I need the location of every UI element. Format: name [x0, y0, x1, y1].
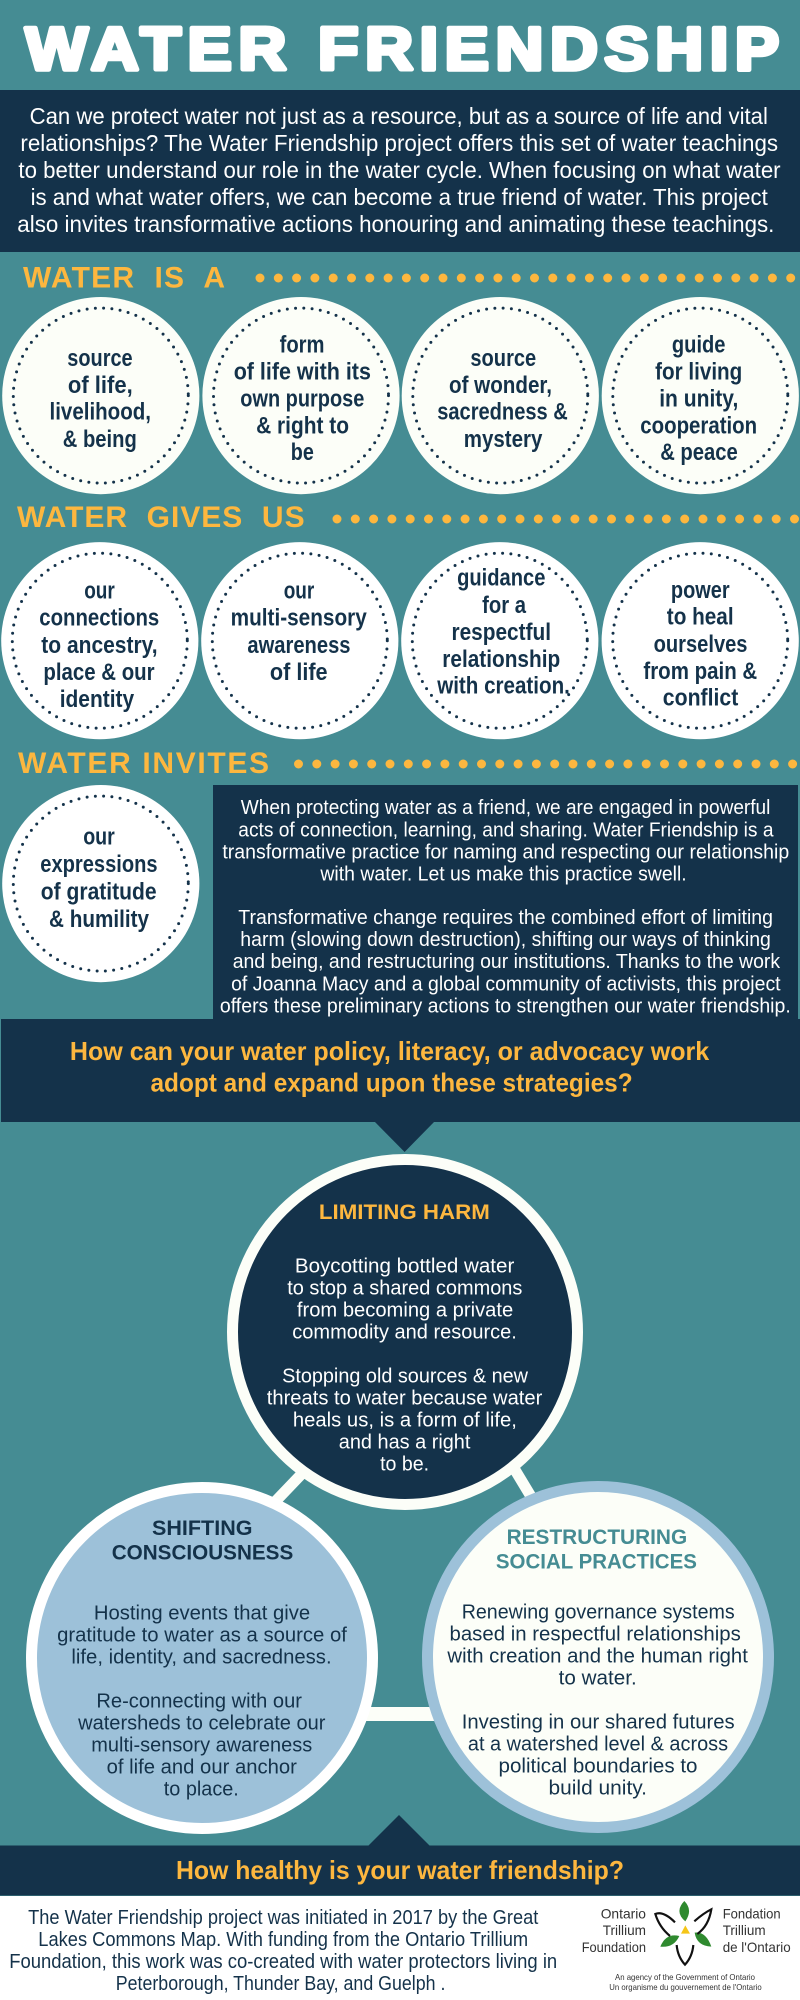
circle: expressions of gratitude: of gratitude [41, 879, 157, 906]
footer credit text [9, 1906, 557, 1995]
circle: expressions of gratitude [2, 785, 199, 982]
circle: source of life: of life, [68, 372, 133, 399]
footer credit text: Foundation, this work was co-created with water protectors living in [9, 1950, 557, 1973]
circle: connections: place & our [43, 659, 155, 686]
banner: strategies question: adopt and expand upon these strategies? [150, 1068, 633, 1098]
circle: limiting harm: to be. [380, 1453, 429, 1476]
logo: Ontario Trillium Foundation: An agency of the Government of Ontario [615, 1972, 755, 1982]
circle: guidance [401, 542, 598, 739]
circle: source of wonder: of wonder, [449, 372, 552, 399]
logo: Ontario Trillium Foundation: Fondation [723, 1905, 781, 1921]
circle: shifting consciousness [32, 1488, 372, 1828]
circle: multi-sensory awareness [201, 542, 398, 739]
circle: power to heal: to heal [667, 604, 734, 631]
circle: form of life: form [280, 331, 324, 358]
circle: connections: identity [60, 686, 135, 713]
logo: Ontario Trillium Foundation: de l'Ontario [723, 1939, 791, 1955]
circle: restructuring social practices: to water. [559, 1666, 637, 1689]
circle: shifting consciousness: watersheds to celebrate our [77, 1711, 326, 1734]
panel: transformative practice text: When protecting water as a friend, we are engaged in powerful [241, 796, 770, 819]
panel: transformative practice text [213, 785, 798, 1020]
circle: restructuring social practices: at a watershed level & across [468, 1732, 728, 1755]
circle: form of life: & right to [256, 412, 349, 439]
circle: limiting harm: commodity and resource. [292, 1321, 517, 1344]
circle: limiting harm [232, 1160, 578, 1504]
circle: guidance: guidance [457, 565, 545, 592]
banner: strategies question [1, 1019, 800, 1152]
circle: limiting harm: LIMITING HARM [319, 1201, 490, 1224]
circle: source of wonder: source [470, 345, 536, 372]
circle: guidance: respectful [452, 619, 551, 646]
circle: connections: to ancestry, [41, 632, 158, 659]
circle: form of life [202, 297, 400, 494]
circle: guide for living [602, 297, 799, 494]
circle: source of life: & being [63, 426, 137, 453]
panel: introduction [0, 90, 800, 252]
circle: limiting harm: Boycotting bottled water [295, 1255, 514, 1278]
intro text: also invites transformative actions honouring and animating these teachings. [17, 211, 774, 237]
panel: water is a circles [2, 297, 799, 494]
circle: multi-sensory awareness: multi-sensory [231, 605, 367, 632]
intro text: Can we protect water not just as a resource, but as a source of life and vital [30, 103, 768, 129]
banner: water friendship health question: How healthy is your water friendship? [176, 1855, 624, 1885]
logo: Ontario Trillium Foundation: Foundation [582, 1939, 646, 1955]
circle: shifting consciousness: Hosting events that give [94, 1601, 310, 1624]
circle: expressions of gratitude: & humility [49, 906, 149, 933]
circle: power to heal: conflict [663, 685, 738, 712]
circle: guidance: for a [482, 592, 526, 619]
banner: strategies question: How can your water policy, literacy, or advocacy work [70, 1036, 710, 1066]
footer credit text: Peterborough, Thunder Bay, and Guelph . [116, 1972, 445, 1995]
circle: source of wonder: mystery [464, 426, 543, 453]
circle: restructuring social practices: SOCIAL PRACTICES [496, 1550, 697, 1573]
circle: restructuring social practices: Investing in our shared futures [462, 1710, 735, 1733]
circle: guide for living: & peace [660, 439, 738, 466]
circle: restructuring social practices: political boundaries to [498, 1754, 698, 1777]
panel: transformative practice text: with water. Let us make this practice swell. [319, 863, 687, 886]
circle: guidance: relationship [442, 646, 560, 673]
panel: transformative practice text: Transformative change requires the combined effort of limiting [238, 906, 773, 929]
circle: source of life: livelihood, [50, 398, 151, 426]
logo: Ontario Trillium Foundation [582, 1901, 791, 1992]
circle: form of life: be [291, 439, 314, 466]
intro text: is and what water offers, we can become a true friend of water. This project [31, 184, 768, 210]
circle: restructuring social practices: RESTRUCTURING [507, 1526, 687, 1549]
panel: transformative practice text: of Joanna Macy and a global community of activists, this project [231, 972, 781, 995]
circle: multi-sensory awareness: of life [270, 659, 328, 686]
panel: transformative practice text: acts of connection, learning, and sharing. Water Friendship is a [238, 818, 774, 841]
circle: multi-sensory awareness: awareness [247, 632, 350, 659]
logo: Ontario Trillium Foundation: Trillium [603, 1922, 646, 1938]
heading: water gives us: WATER GIVES US [17, 501, 305, 534]
circle: expressions of gratitude: our [83, 823, 115, 850]
heading: water invites: WATER INVITES [18, 747, 269, 780]
circle: shifting consciousness: multi-sensory awareness [91, 1733, 312, 1756]
logo: Ontario Trillium Foundation: Trillium [723, 1922, 766, 1938]
circle: source of wonder [402, 297, 599, 494]
circle: shifting consciousness: CONSCIOUSNESS [112, 1541, 293, 1564]
circle: shifting consciousness: of life and our anchor [107, 1755, 297, 1778]
circle: power to heal [602, 542, 799, 739]
icon: trillium flower [655, 1901, 711, 1965]
circle: connections: our [84, 578, 115, 605]
circle: guide for living: guide [672, 331, 726, 358]
circle: limiting harm: to stop a shared commons [287, 1277, 522, 1300]
circle: power to heal: from pain & [643, 658, 757, 685]
circle: limiting harm: heals us, is a form of life, [293, 1409, 517, 1432]
intro text [17, 103, 781, 237]
footer credit text: Lakes Commons Map. With funding from the Ontario Trillium [38, 1928, 528, 1951]
circle: restructuring social practices: with creation and the human right [446, 1644, 748, 1667]
circle: connections [1, 542, 198, 739]
panel: transformative practice text: and being, and restructuring our institutions. Thanks to the work [233, 950, 781, 973]
intro text: relationships? The Water Friendship project offers this set of water teachings [20, 130, 778, 156]
banner: water friendship health question [0, 1815, 800, 1896]
circle: shifting consciousness: life, identity, and sacredness. [71, 1645, 332, 1668]
panel: transformative practice text: harm (slowing down destruction), shifting our ways of thinking [240, 928, 771, 951]
circle: limiting harm: and has a right [339, 1431, 471, 1454]
circle: multi-sensory awareness: our [284, 578, 315, 605]
circle: shifting consciousness: Re-connecting with our [96, 1689, 302, 1712]
panel: water gives us circles [1, 542, 799, 739]
circle: guide for living: for living [655, 358, 742, 385]
circle: expressions of gratitude: expressions [40, 851, 158, 878]
circle: restructuring social practices: Renewing governance systems [462, 1600, 735, 1623]
circle: limiting harm: from becoming a private [297, 1299, 513, 1322]
logo: Ontario Trillium Foundation: Un organisme du gouvernement de l'Ontario [609, 1982, 762, 1992]
circle: limiting harm: Stopping old sources & new [282, 1365, 528, 1388]
connectors between strategy circles [250, 1445, 550, 1721]
circle: restructuring social practices: based in respectful relationships [450, 1622, 741, 1645]
title: WATER FRIENDSHIP [26, 16, 779, 83]
circle: guide for living: cooperation [640, 412, 757, 439]
circle: restructuring social practices [428, 1486, 768, 1828]
circle: shifting consciousness: to place. [164, 1777, 239, 1800]
heading: water is a: WATER IS A [23, 262, 225, 294]
circle: connections: connections [39, 604, 159, 631]
circle: source of life: source [67, 345, 133, 372]
circle: form of life: own purpose [240, 385, 364, 412]
circle: guide for living: in unity, [659, 385, 738, 412]
circle: shifting consciousness: gratitude to water as a source of [57, 1623, 347, 1646]
circle: power to heal: ourselves [654, 631, 748, 658]
circle: guidance: with creation. [436, 673, 570, 700]
circle: source of life [2, 297, 199, 494]
circle: power to heal: power [671, 577, 730, 604]
circle: form of life: of life with its [234, 358, 371, 385]
footer credit text: The Water Friendship project was initiated in 2017 by the Great [28, 1906, 539, 1929]
circle: shifting consciousness: SHIFTING [152, 1517, 252, 1540]
circle: source of wonder: sacredness & [437, 398, 568, 426]
panel: footer [0, 1896, 800, 2000]
circle: limiting harm: threats to water because water [267, 1387, 542, 1410]
logo: Ontario Trillium Foundation: Ontario [601, 1905, 646, 1921]
circle: restructuring social practices: build unity. [548, 1776, 647, 1799]
